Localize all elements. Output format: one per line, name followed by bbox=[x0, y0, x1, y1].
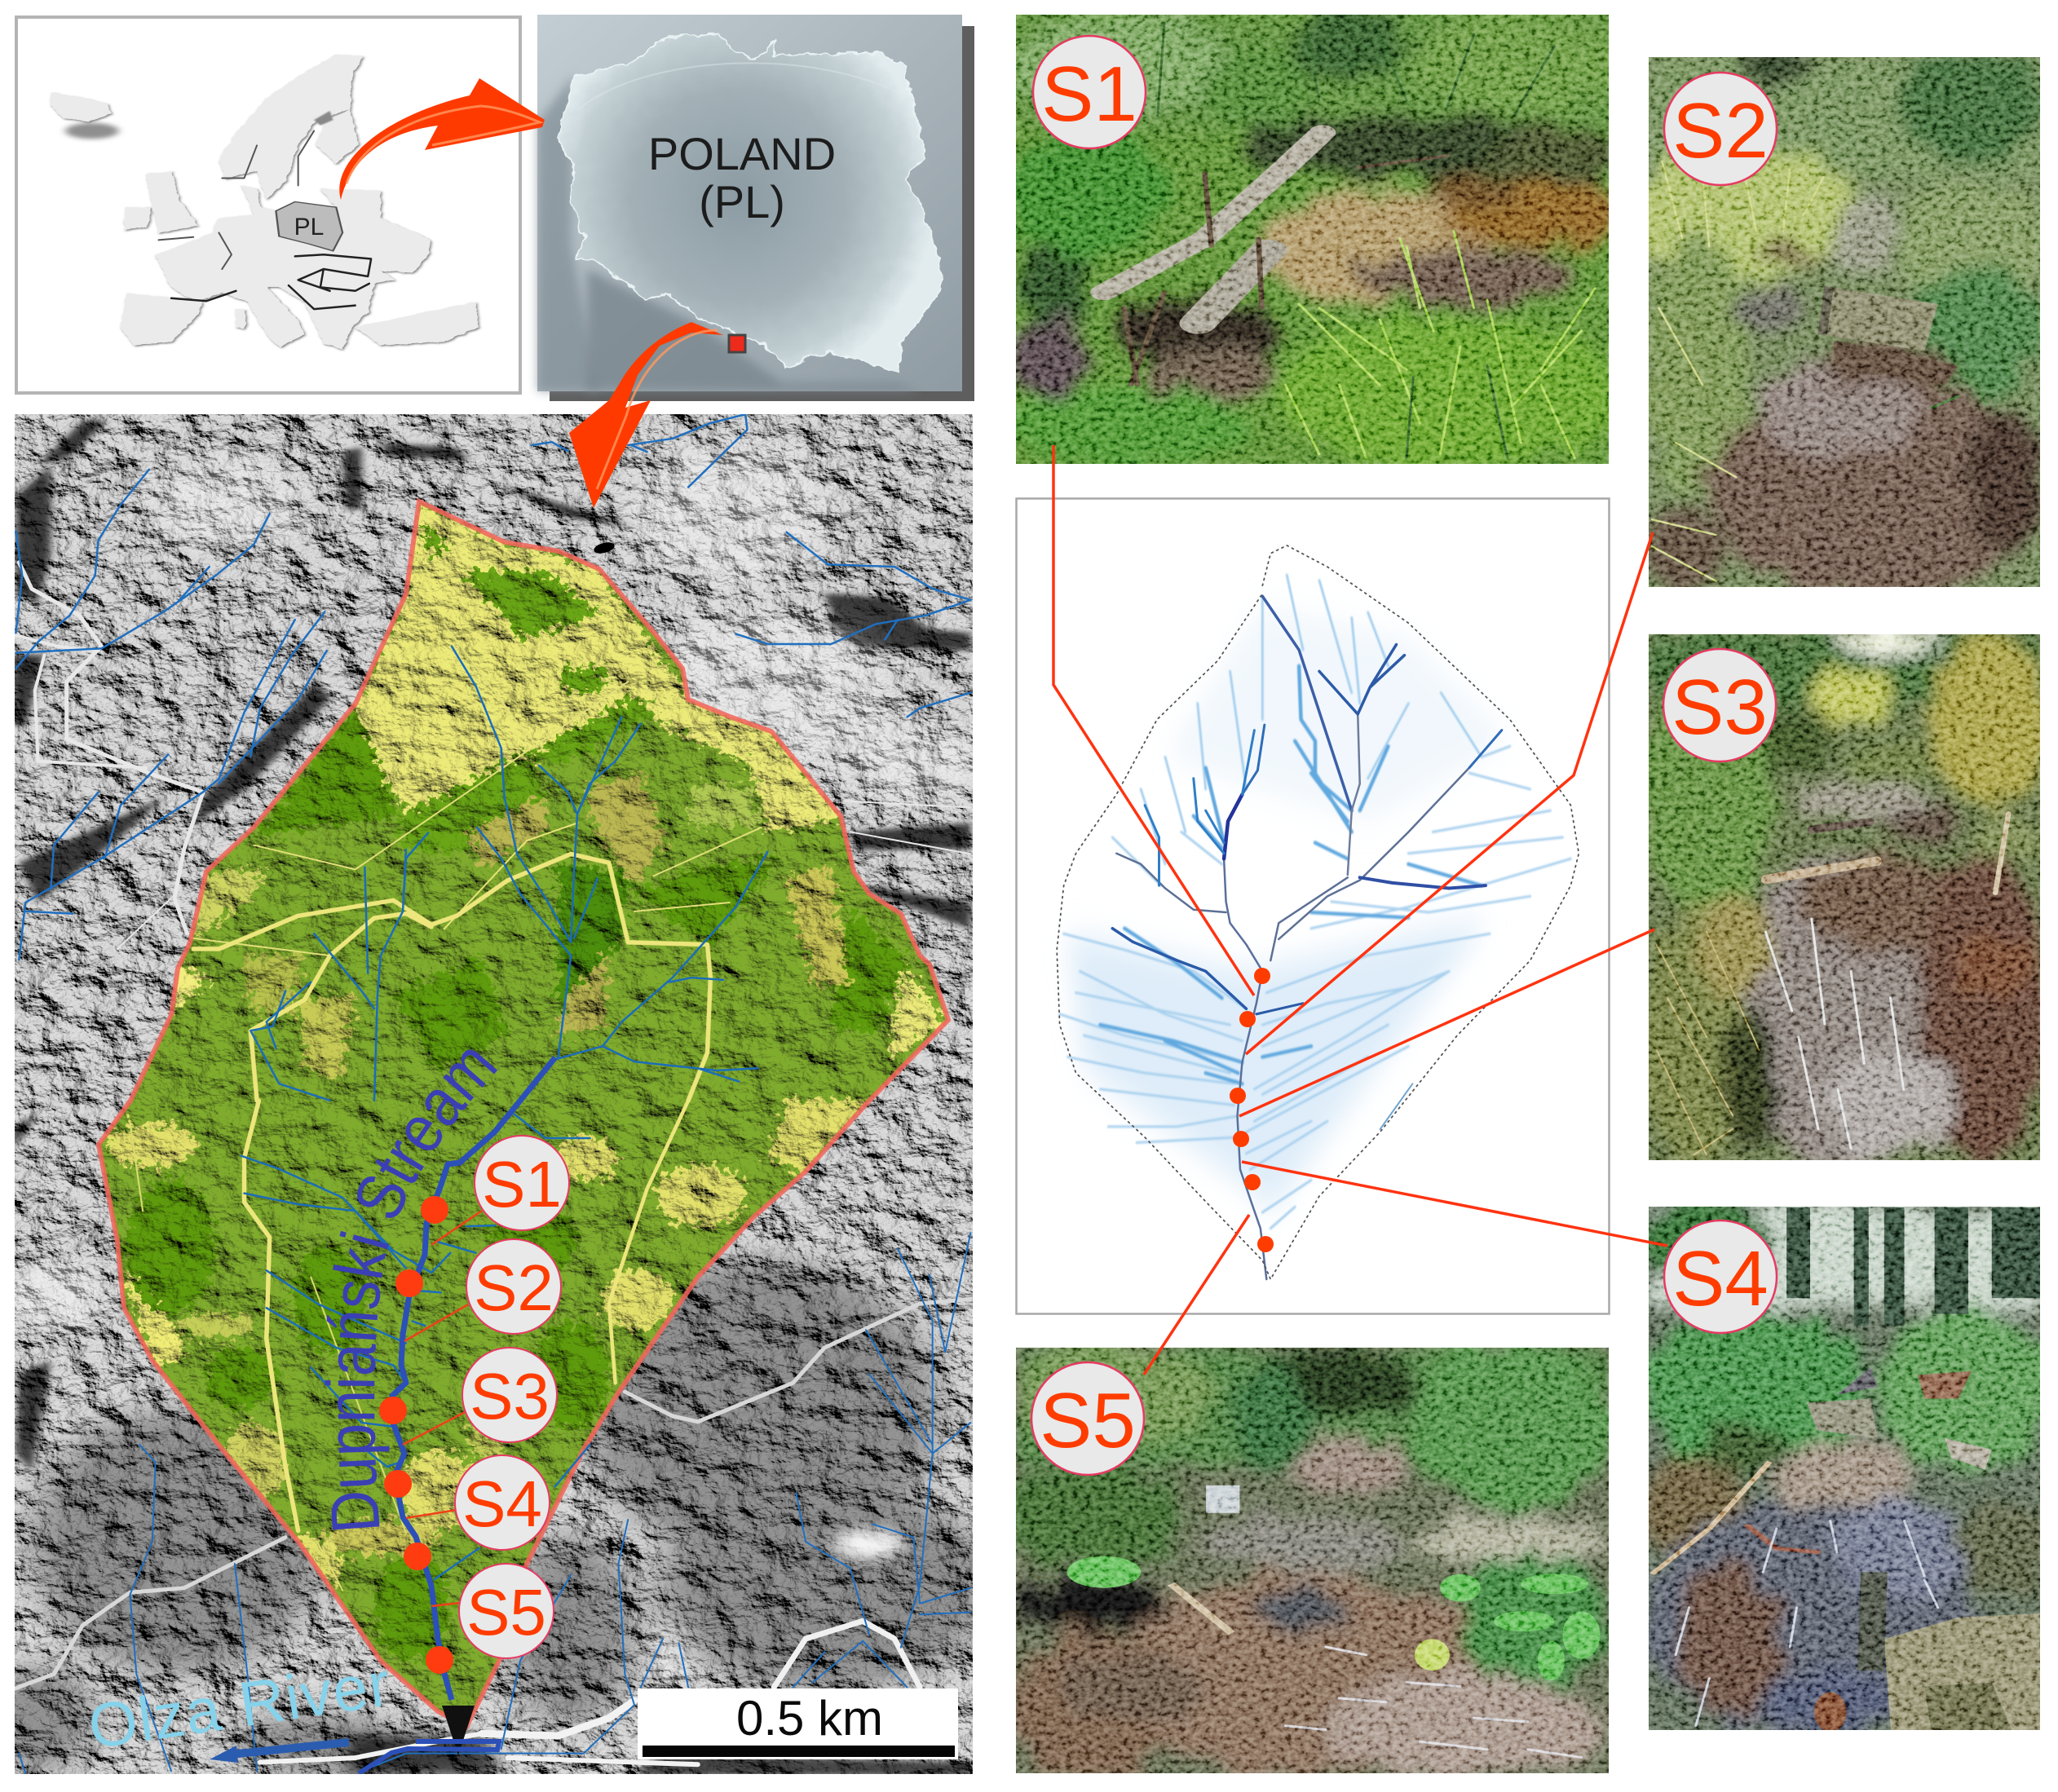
photo texture bbox=[1016, 15, 1609, 464]
thin blue streams outside catchment bbox=[15, 414, 970, 1773]
photo badge S1 bbox=[1033, 36, 1146, 148]
yellow forest roads inside catchment bbox=[193, 823, 710, 1530]
photo badge S4: S4 bbox=[1672, 1235, 1769, 1322]
small pond bbox=[594, 542, 615, 554]
map badge S2 bbox=[466, 1239, 561, 1334]
panel: hillshade map with catchment bbox=[15, 414, 973, 1774]
photo S5 bbox=[1003, 1344, 1615, 1781]
photo badge S5 bbox=[1031, 1362, 1144, 1475]
map badge S4: S4 bbox=[462, 1468, 542, 1540]
label: Dupniański Stream: Dupniański Stream bbox=[325, 1049, 497, 1529]
main channel bbox=[392, 1057, 555, 1700]
catchment dotted outline bbox=[1057, 545, 1579, 1279]
photo badge S2: S2 bbox=[1672, 87, 1769, 174]
leader lines from sites to photos bbox=[1053, 445, 1667, 1375]
map badge S2: S2 bbox=[474, 1251, 554, 1324]
Poland highlight bbox=[276, 202, 342, 251]
photo S2 bbox=[1628, 46, 2046, 600]
label PL: PL bbox=[294, 214, 324, 241]
photo badge S2 bbox=[1664, 73, 1777, 185]
map badge S4 bbox=[455, 1455, 550, 1550]
photo texture bbox=[1649, 1207, 2040, 1730]
catchment outlet marker bbox=[442, 1706, 475, 1755]
river flow arrow bbox=[210, 1742, 349, 1763]
label POLAND (PL): POLAND bbox=[648, 128, 836, 179]
map badge S5: S5 bbox=[466, 1576, 546, 1649]
photo texture bbox=[1016, 1348, 1609, 1773]
panel: Poland map bbox=[537, 15, 974, 401]
map badge S3 bbox=[462, 1348, 557, 1442]
photo texture bbox=[1649, 634, 2040, 1160]
site leader lines on map bbox=[403, 1211, 482, 1606]
green stands bbox=[254, 523, 908, 1070]
white forest roads outside catchment bbox=[13, 563, 970, 1764]
hillshade terrain bbox=[0, 414, 990, 1776]
study area marker bbox=[729, 335, 745, 352]
map badge S1 bbox=[475, 1136, 569, 1230]
scale bar bbox=[638, 1688, 958, 1759]
photo badge S3: S3 bbox=[1672, 664, 1768, 751]
photo S4 bbox=[1636, 1198, 2052, 1737]
main drainage network bbox=[1112, 596, 1502, 1279]
site points on map bbox=[379, 1196, 453, 1674]
site points on flow map bbox=[1230, 968, 1274, 1252]
yellow clearings bbox=[171, 503, 945, 1062]
photo texture bbox=[1649, 57, 2040, 587]
scale bar: 0.5 km bbox=[736, 1691, 883, 1746]
pale linear tracks bbox=[190, 625, 762, 956]
panel: Poland map: (PL) bbox=[699, 176, 785, 227]
panel: Europe locator map bbox=[16, 17, 520, 393]
Poland silhouette bbox=[559, 31, 943, 373]
photo S1 bbox=[996, 11, 1622, 470]
map badge S5 bbox=[459, 1564, 554, 1658]
catchment vegetation map bbox=[82, 489, 962, 1737]
panel: flow accumulation leaf map bbox=[1016, 499, 1610, 1314]
tributaries inside catchment bbox=[241, 647, 767, 1579]
photo S3 bbox=[1641, 628, 2048, 1168]
photo badge S4 bbox=[1664, 1220, 1777, 1333]
Olza River channel bbox=[359, 1741, 499, 1773]
map badge S1: S1 bbox=[482, 1148, 562, 1220]
photo badge S1: S1 bbox=[1041, 51, 1137, 138]
olive patches bbox=[241, 775, 850, 1079]
relief texture over catchment bbox=[82, 489, 962, 1737]
diffuse flow lines bbox=[1060, 575, 1570, 1229]
map of Europe bbox=[51, 55, 479, 349]
catchment boundary bbox=[99, 501, 948, 1727]
photo badge S5: S5 bbox=[1040, 1377, 1136, 1464]
light blue wash bbox=[1068, 607, 1510, 1212]
photo badge S3 bbox=[1663, 649, 1776, 761]
label: Olza River: Olza River bbox=[84, 1649, 394, 1763]
map badge S3: S3 bbox=[470, 1360, 550, 1432]
arrow: Poland to study catchment bbox=[569, 322, 723, 508]
arrow: Europe to Poland bbox=[339, 78, 545, 200]
